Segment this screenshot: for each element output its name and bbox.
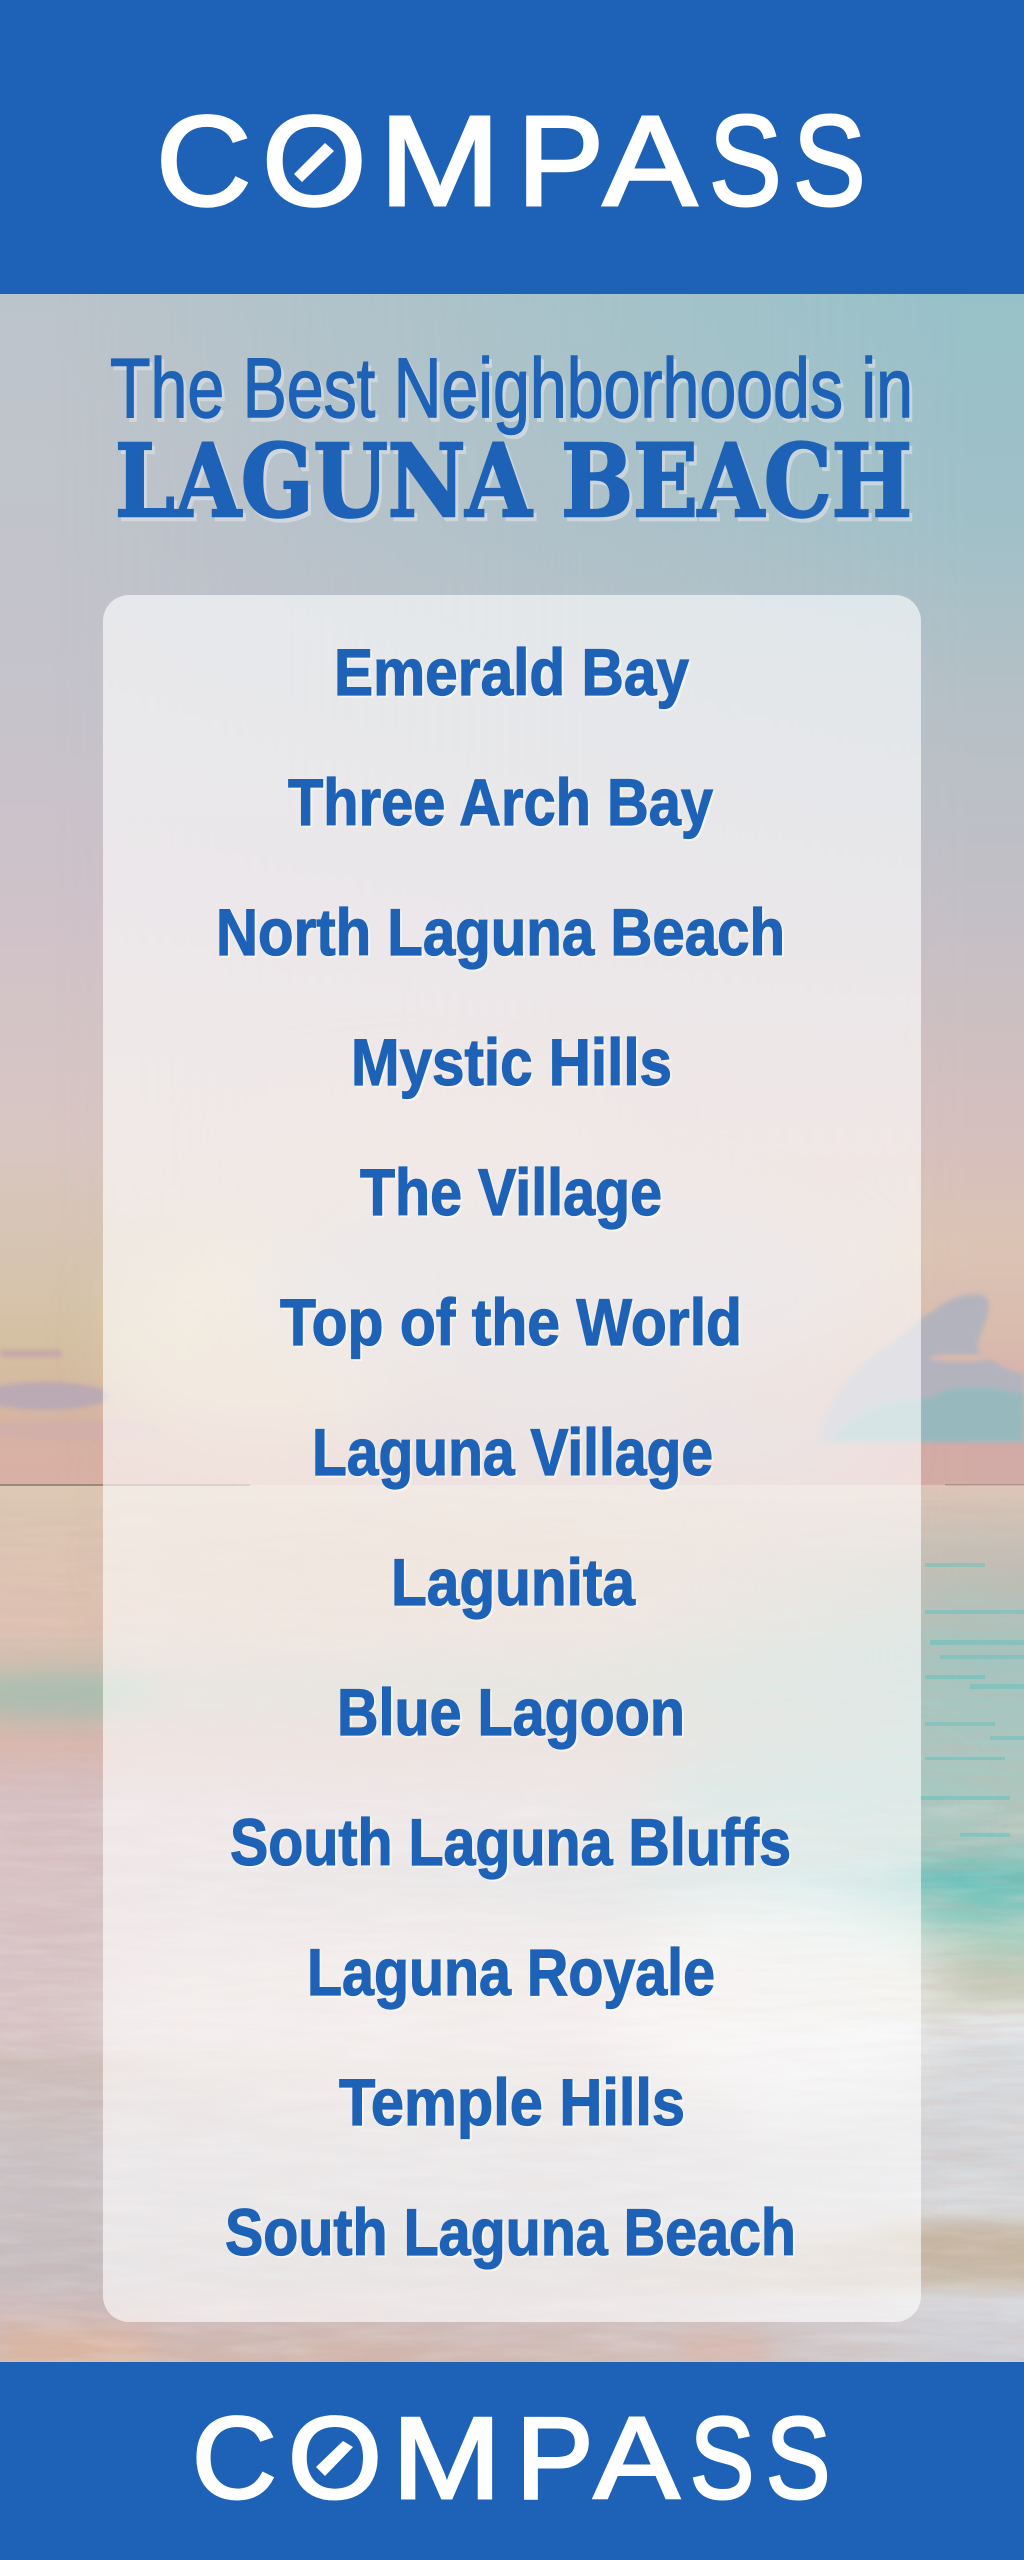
logo: Compass footer: A <box>594 2393 679 2523</box>
list item: Temple Hills: Temple Hills <box>339 2065 685 2139</box>
logo: Compass header <box>156 90 866 233</box>
header band <box>0 0 1024 294</box>
logo: Compass footer: O <box>288 2393 382 2523</box>
logo: Compass header: A <box>603 90 697 233</box>
list item: South Laguna Beach: South Laguna Beach <box>225 2195 796 2269</box>
list item: North Laguna Beach: North Laguna Beach <box>216 895 785 969</box>
logo: Compass footer: M <box>392 2393 501 2523</box>
logo: Compass footer: C <box>192 2393 277 2523</box>
list item: Three Arch Bay: Three Arch Bay <box>288 765 713 839</box>
panel: neighborhoods list <box>103 595 921 2322</box>
footer band <box>0 2362 1024 2560</box>
logo: Compass header: O <box>262 90 366 233</box>
logo: Compass footer: S <box>766 2393 830 2523</box>
logo: Compass footer: P <box>516 2393 593 2523</box>
list item: Lagunita: Lagunita <box>391 1545 636 1619</box>
list item: Mystic Hills: Mystic Hills <box>351 1025 672 1099</box>
logo: Compass header: M <box>379 90 501 233</box>
list item: Laguna Village: Laguna Village <box>312 1415 713 1489</box>
list item: Top of the World: Top of the World <box>280 1285 742 1359</box>
list item: Emerald Bay: Emerald Bay <box>334 635 689 709</box>
list item: Blue Lagoon: Blue Lagoon <box>337 1675 685 1749</box>
list item: Laguna Royale: Laguna Royale <box>307 1935 715 2009</box>
list item: The Village: The Village <box>360 1155 662 1229</box>
logo: Compass footer: S <box>690 2393 754 2523</box>
logo: Compass header: S <box>793 90 866 233</box>
title <box>110 341 913 540</box>
logo: Compass header: C <box>156 90 251 233</box>
title: LAGUNA BEACH <box>115 422 912 540</box>
list item: South Laguna Bluffs: South Laguna Bluffs <box>230 1805 791 1879</box>
logo: Compass header: S <box>709 90 782 233</box>
logo: Compass header: P <box>517 90 604 233</box>
